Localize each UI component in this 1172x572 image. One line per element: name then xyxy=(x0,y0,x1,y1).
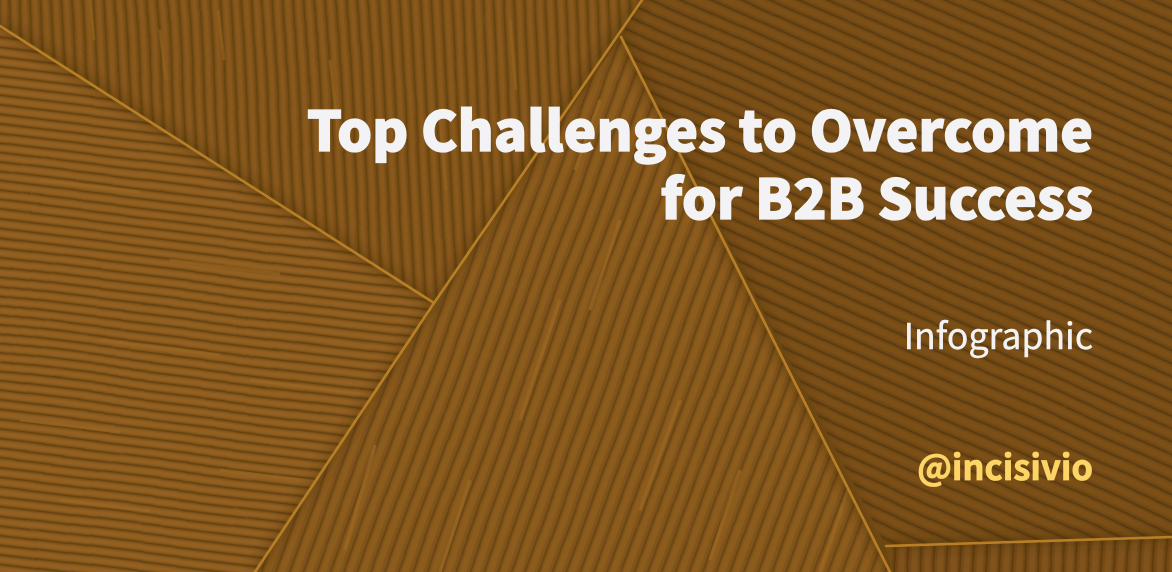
title: Top Challenges to Overcome xyxy=(307,87,1093,167)
title xyxy=(307,87,1093,235)
panel: right facet xyxy=(600,0,1172,560)
panel: bottom-right facet xyxy=(892,538,1169,572)
panel: center facet xyxy=(240,20,910,572)
panel: top-left facet xyxy=(0,0,636,300)
subtitle: Infographic xyxy=(904,309,1093,360)
handle: @incisivio xyxy=(917,440,1093,490)
title: for B2B Success xyxy=(661,155,1093,235)
panel: left facet xyxy=(0,28,432,572)
